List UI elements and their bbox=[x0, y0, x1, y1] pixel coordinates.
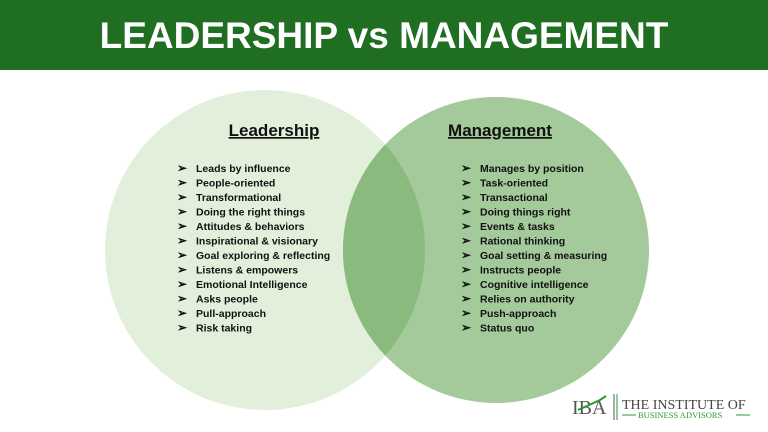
list: management: ➢ bbox=[461, 306, 472, 320]
title bar: LEADERSHIP vs MANAGEMENT bbox=[100, 15, 668, 56]
list: leadership: Attitudes & behaviors bbox=[196, 221, 305, 233]
list: leadership: ➢ bbox=[177, 306, 188, 320]
list: leadership: Transformational bbox=[196, 192, 281, 204]
heading: Management: Management bbox=[448, 121, 552, 140]
list: management: Cognitive intelligence bbox=[480, 279, 589, 291]
list: leadership: Pull-approach bbox=[196, 308, 266, 320]
logo: THE INSTITUTE OF bbox=[622, 398, 746, 413]
list: leadership: Asks people bbox=[196, 294, 258, 306]
list: management: ➢ bbox=[461, 219, 472, 233]
list: leadership: ➢ bbox=[177, 204, 188, 218]
list: management bbox=[461, 161, 607, 334]
list: management: Relies on authority bbox=[480, 294, 575, 306]
list: management: Instructs people bbox=[480, 264, 561, 276]
list: leadership: ➢ bbox=[177, 219, 188, 233]
logo bbox=[572, 394, 750, 420]
list: management: Transactional bbox=[480, 192, 548, 204]
list: leadership: ➢ bbox=[177, 320, 188, 334]
list: management: Rational thinking bbox=[480, 236, 565, 248]
list: management: ➢ bbox=[461, 234, 472, 248]
list: leadership: Goal exploring & reflecting bbox=[196, 250, 330, 262]
list: leadership: Doing the right things bbox=[196, 206, 305, 218]
list: leadership: Inspirational & visionary bbox=[196, 236, 318, 248]
list: management: ➢ bbox=[461, 248, 472, 262]
list: leadership: ➢ bbox=[177, 176, 188, 190]
logo: IBA bbox=[572, 397, 607, 419]
list: management: Status quo bbox=[480, 322, 534, 334]
list: management: Doing things right bbox=[480, 206, 571, 218]
list: management: ➢ bbox=[461, 190, 472, 204]
list: management: ➢ bbox=[461, 292, 472, 306]
list: leadership: ➢ bbox=[177, 248, 188, 262]
list: leadership: Risk taking bbox=[196, 322, 252, 334]
list: leadership: ➢ bbox=[177, 161, 188, 175]
list: leadership: Leads by influence bbox=[196, 163, 291, 175]
list: management: ➢ bbox=[461, 262, 472, 276]
list: leadership: Listens & empowers bbox=[196, 264, 298, 276]
circle: management bbox=[343, 97, 649, 403]
list: leadership: People-oriented bbox=[196, 178, 275, 190]
list: management: ➢ bbox=[461, 176, 472, 190]
list: management: ➢ bbox=[461, 320, 472, 334]
list: management: Push-approach bbox=[480, 308, 556, 320]
list: management: Events & tasks bbox=[480, 221, 555, 233]
list: management: ➢ bbox=[461, 161, 472, 175]
list: management: Task-oriented bbox=[480, 178, 548, 190]
list: leadership: ➢ bbox=[177, 277, 188, 291]
list: management: Goal setting & measuring bbox=[480, 250, 607, 262]
list: leadership: ➢ bbox=[177, 292, 188, 306]
heading: Leadership: Leadership bbox=[229, 121, 319, 140]
logo: BUSINESS ADVISORS bbox=[638, 410, 723, 420]
venn diagram bbox=[105, 90, 750, 420]
list: leadership: ➢ bbox=[177, 234, 188, 248]
list: leadership: ➢ bbox=[177, 190, 188, 204]
list: leadership: Emotional Intelligence bbox=[196, 279, 308, 291]
overlap bbox=[343, 144, 425, 356]
list: leadership: ➢ bbox=[177, 262, 188, 276]
list: management: Manages by position bbox=[480, 163, 584, 175]
list: management: ➢ bbox=[461, 277, 472, 291]
title bar bbox=[0, 0, 768, 70]
circle: leadership bbox=[105, 90, 425, 410]
list: management: ➢ bbox=[461, 204, 472, 218]
list: leadership bbox=[177, 161, 330, 334]
